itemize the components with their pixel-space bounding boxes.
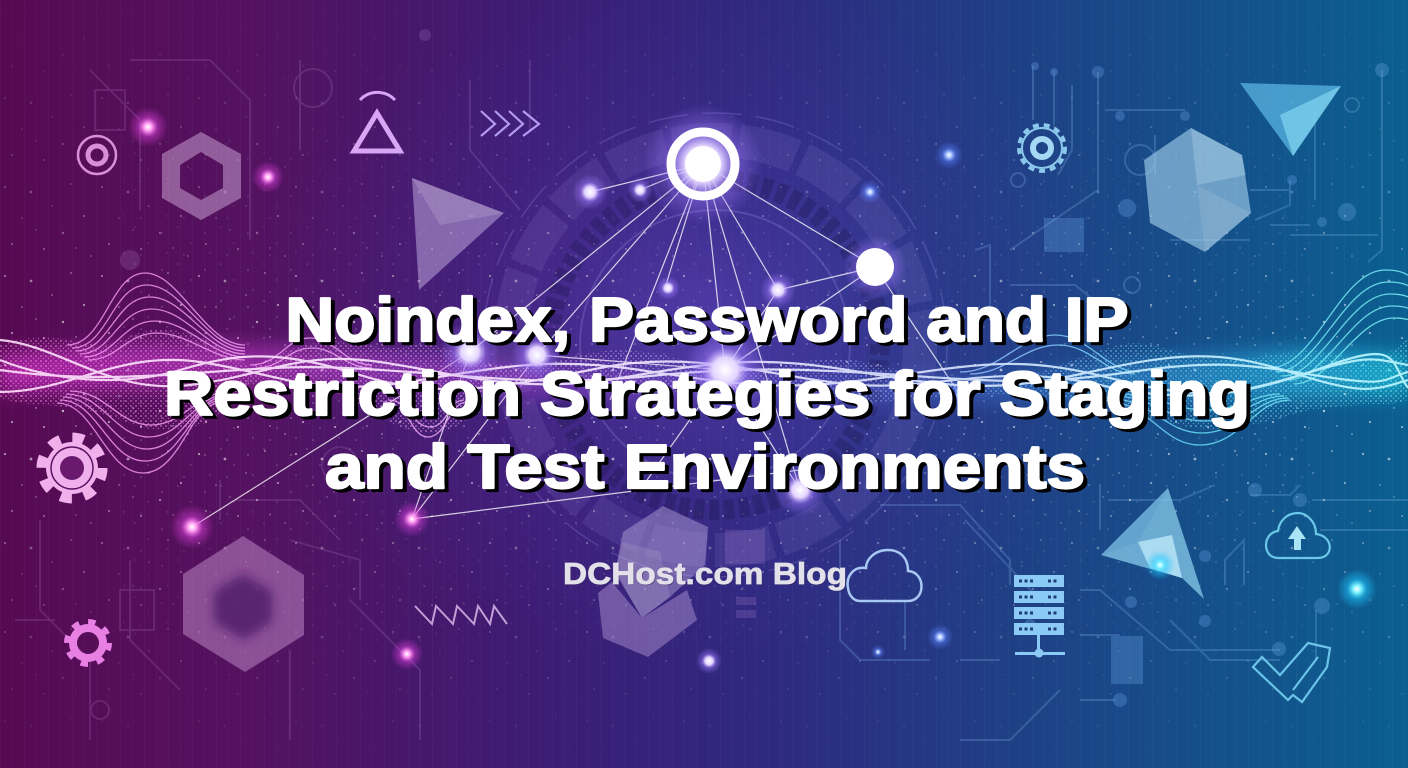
subtitle: blog name: DCHost.com Blog	[564, 557, 848, 592]
dotted ribbon texture	[0, 330, 1408, 433]
icon: dashed zigzag	[415, 606, 507, 624]
icon: target circle	[78, 136, 116, 174]
title	[164, 286, 1254, 505]
title: and Test Environments	[325, 433, 1085, 502]
icon: triangle with arc	[354, 92, 400, 151]
title: Noindex, Password and IP	[290, 289, 1132, 358]
network lines	[192, 164, 960, 527]
icon: glass triangle	[412, 178, 504, 290]
wave ribbon	[0, 270, 1408, 473]
icon: cog top right	[1019, 125, 1065, 171]
title: Restriction Strategies for Staging	[168, 363, 1254, 432]
glowing nodes	[128, 107, 1377, 674]
title: Restriction Strategies for Staging	[164, 360, 1250, 429]
icon: server rack	[1014, 575, 1065, 658]
icon: center polyhedra	[598, 506, 708, 657]
ribbon glow	[0, 344, 1408, 403]
icon: hexagon outline	[162, 132, 241, 220]
icon: large hexagon	[183, 536, 304, 672]
bright core lines	[0, 340, 1408, 396]
icon: upload cloud	[1266, 513, 1330, 558]
left and right line fans	[57, 270, 1408, 473]
icon: glass arrowhead	[1101, 488, 1204, 599]
icon: checkmark	[1253, 643, 1330, 702]
icon: lower left gear	[68, 623, 108, 663]
central circular hud	[483, 113, 947, 577]
icon: chevrons	[481, 111, 539, 136]
icon: cloud outline	[848, 550, 922, 601]
title: Noindex, Password and IP	[286, 286, 1128, 355]
title: and Test Environments	[329, 436, 1089, 505]
icon: glass inverted triangle	[1240, 83, 1341, 156]
subtitle: blog name: DCHost.com Blog	[563, 556, 847, 591]
icon: glass polyhedron	[1144, 128, 1251, 252]
top hub node with ring	[643, 104, 763, 224]
icon: left gear	[43, 439, 101, 497]
